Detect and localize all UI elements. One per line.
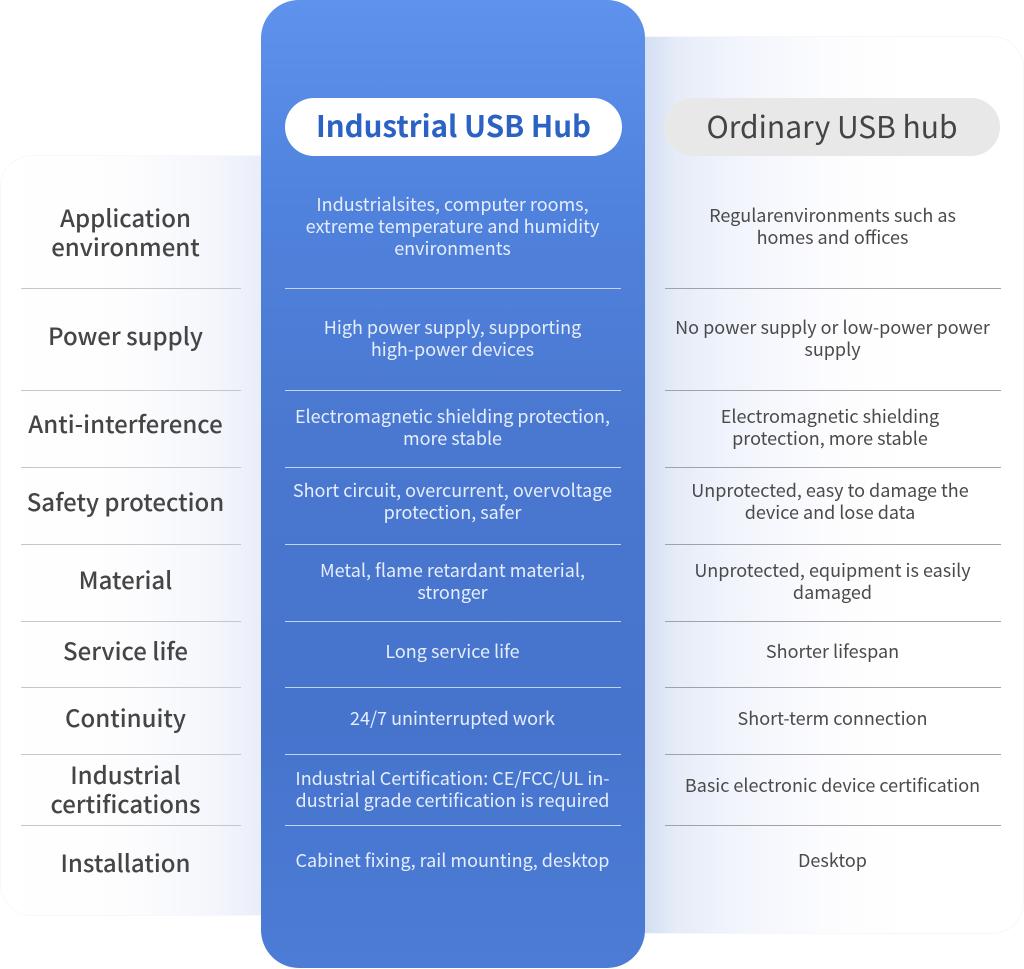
ordinary: material: Unprotected, equipment is easily damaged [694,557,971,605]
industrial: safety protection: Short circuit, overcurrent, overvoltage protection, safer [293,477,612,525]
heading: Ordinary USB hub: Ordinary USB hub [706,103,958,147]
ordinary: power supply: No power supply or low-power power supply [675,314,990,362]
row label: Power supply: Power supply [48,316,203,352]
industrial: anti-interference: Electromagnetic shielding protection, more stable [295,403,610,451]
panel: left row labels [0,155,275,916]
ordinary: anti-interference: Electromagnetic shielding protection, more stable [721,403,939,451]
industrial: power supply: High power supply, supporting high-power devices [324,314,581,362]
panel: ordinary USB hub column [630,36,1024,934]
ordinary: continuity: Short-term connection [738,705,927,731]
row label: Continuity: Continuity [65,698,186,734]
ordinary: application environment: Regularenvironments such as homes and offices [709,202,956,250]
ordinary: service life: Shorter lifespan [766,638,899,664]
panel: industrial USB hub column [261,0,645,968]
row label: Application environment: Application environment [51,199,200,263]
heading: Ordinary USB hub [664,98,1000,156]
industrial: application environment: Industrialsites, computer rooms, extreme temperature and humidity environments [306,191,599,261]
industrial: service life: Long service life [385,638,520,664]
industrial: installation: Cabinet fixing, rail mounting, desktop [296,847,609,873]
industrial: material: Metal, flame retardant material, stronger [320,557,585,605]
industrial: certifications: Industrial Certification: CE/FCC/UL in- dustrial grade certification is required [295,765,610,813]
ordinary: certifications: Basic electronic device certification [685,772,980,798]
ordinary: safety protection: Unprotected, easy to damage the device and lose data [691,477,969,525]
row label: Installation: Installation [61,844,190,878]
ordinary: installation: Desktop [798,847,867,873]
row label: Safety protection: Safety protection [27,482,224,518]
heading: Industrial USB Hub [285,98,622,156]
row label: Service life: Service life [63,632,188,666]
row label: Industrial certifications: Industrial certifications [50,756,200,820]
heading: Industrial USB Hub: Industrial USB Hub [316,104,591,146]
industrial: continuity: 24/7 uninterrupted work [350,705,555,731]
row label: Anti-interference: Anti-interference [28,404,223,440]
row label: Material: Material [79,560,172,596]
